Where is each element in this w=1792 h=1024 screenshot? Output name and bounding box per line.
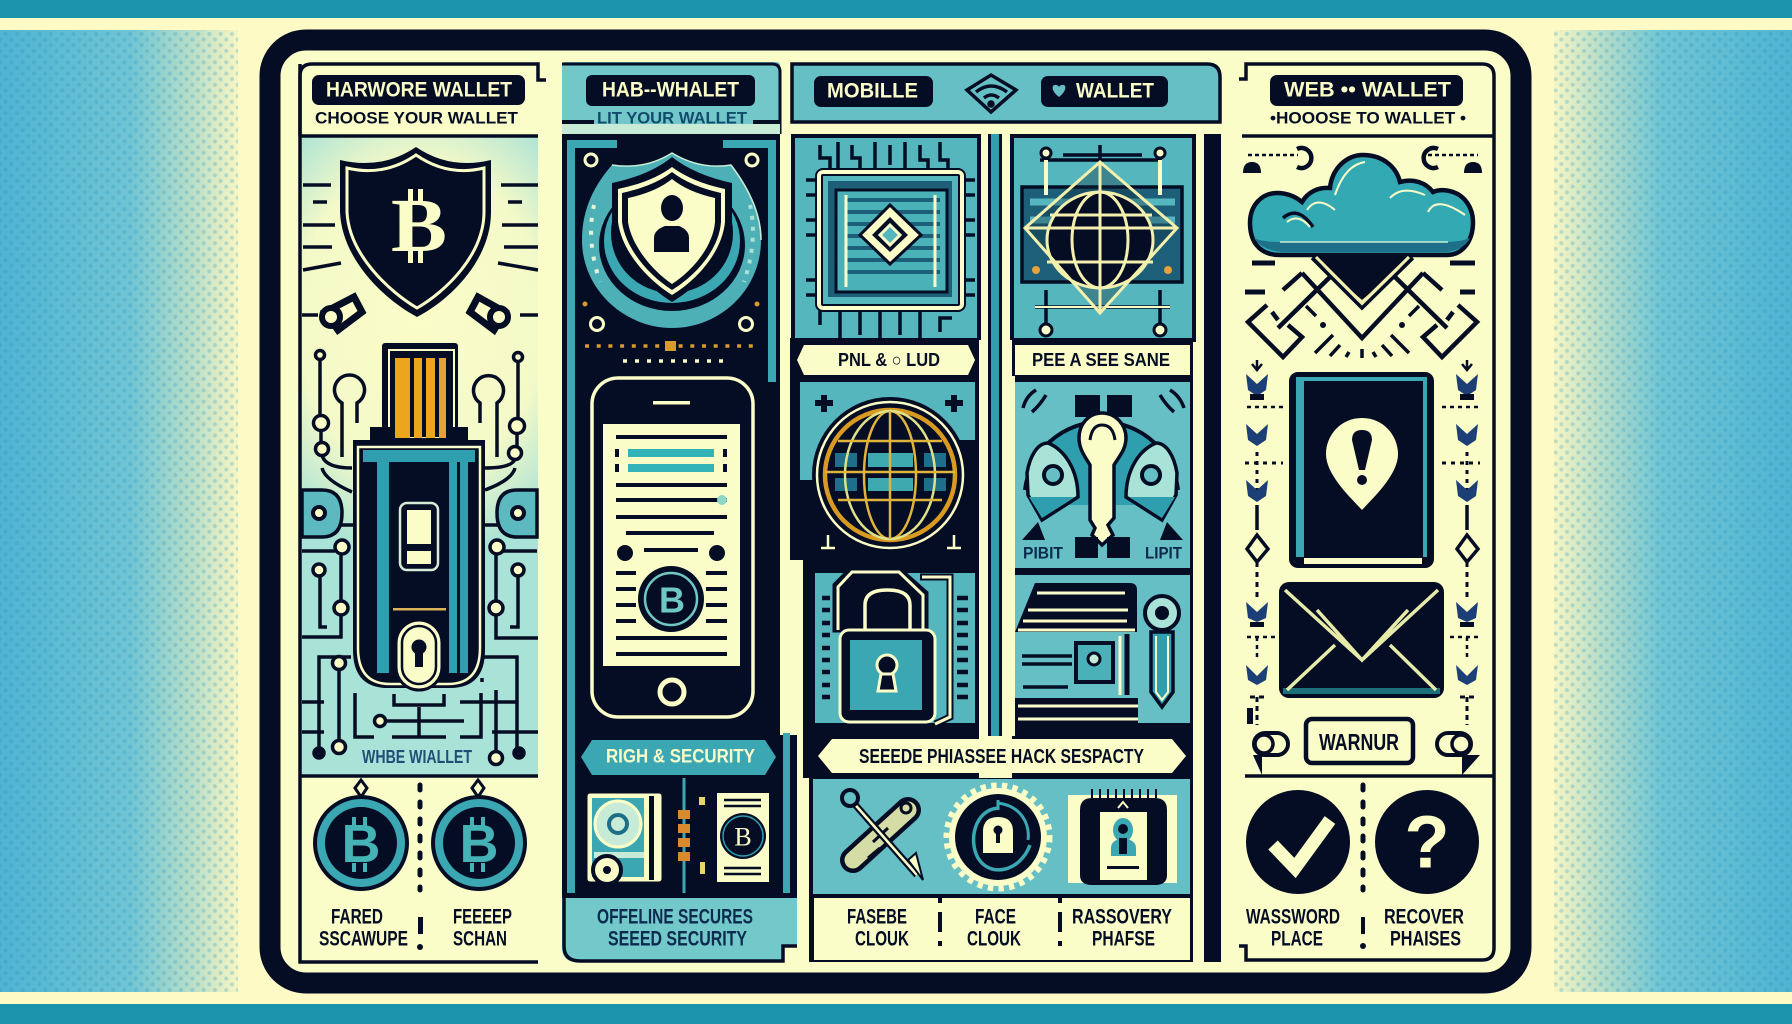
banner: right and security	[581, 740, 776, 775]
key captions: PIBIT	[1023, 544, 1064, 562]
icon: right tag	[470, 297, 508, 330]
icon: left tag	[322, 297, 362, 330]
background halftone right	[1554, 30, 1792, 992]
web captions	[1246, 906, 1464, 950]
hardware title: HARWORE WALLET	[326, 78, 512, 102]
icon: bitcoin coin left	[315, 780, 407, 889]
offline seed caption: SEEED SECURITY	[608, 928, 747, 950]
icon: identity card	[1068, 789, 1177, 885]
toggle icons	[1253, 733, 1480, 775]
web captions: PHAISES	[1390, 928, 1461, 950]
small rivets and dots	[582, 154, 760, 361]
icon: bitcoin coin right: B	[460, 814, 498, 874]
icon: crossed tools	[842, 790, 923, 880]
coin captions: SSCAWUPE	[319, 928, 408, 950]
warning label: WARNUR	[1319, 729, 1399, 755]
side ornaments left	[1245, 360, 1283, 725]
dotted divider	[1360, 785, 1366, 890]
second column header	[562, 62, 780, 124]
label: seed phrase: PEE A SEE SANE	[1032, 350, 1170, 370]
warning label	[1306, 719, 1413, 763]
panel: document stack and pin	[1015, 575, 1190, 723]
label: web wallet: WHBE WIALLET	[362, 747, 472, 767]
hardware illustration background	[300, 136, 538, 776]
icon: cloud	[1250, 155, 1473, 255]
circuit traces	[302, 350, 538, 764]
icon: person shield with ring	[582, 153, 761, 328]
second column subtitle: LIT YOUR WALLET	[597, 108, 748, 128]
panel: captions: FASEBE	[847, 906, 907, 928]
panel: captions: FACE	[975, 906, 1016, 928]
banner: seed phrase backup: SEEEDE PHIASSEE HACK SESPACTY	[859, 746, 1145, 768]
icon: smartphone with seed list: B	[659, 580, 685, 620]
icon: bitcoin coin left: B	[342, 814, 380, 874]
coin captions	[319, 906, 512, 950]
mobile header bar	[792, 64, 1220, 122]
bottom band	[0, 1004, 1792, 1024]
offline seed caption: OFFELINE SECURES	[597, 906, 753, 928]
divider strip	[988, 134, 1002, 736]
coin captions: SCHAN	[453, 928, 507, 950]
panel: security icons	[813, 779, 1190, 894]
panel: captions	[814, 898, 1190, 960]
web title pill: WEB •• WALLET	[1284, 78, 1451, 102]
web captions: PLACE	[1271, 928, 1323, 950]
top band	[0, 0, 1792, 18]
label: pin and cloud	[797, 345, 975, 375]
banner: right and security: RIGH & SECURITY	[606, 746, 755, 768]
panel: globe diamond	[1012, 136, 1194, 340]
panel: hardware wallet column	[300, 64, 546, 962]
wallet title pill: WALLET	[1076, 80, 1154, 102]
panel: chip	[793, 136, 979, 340]
dark column base	[790, 134, 1221, 962]
web subtitle: •HOOOSE TO WALLET •	[1270, 108, 1466, 128]
icon: envelope	[1279, 582, 1444, 698]
panel: padlock	[815, 570, 975, 724]
mobile title pill: MOBILLE	[827, 80, 918, 102]
icon: bitcoin shield	[340, 147, 491, 317]
icon: question circle: ?	[1404, 800, 1450, 884]
icon: top connectors	[1243, 148, 1482, 173]
panel: second wallet column	[562, 62, 797, 962]
icon: right bitcoin card: B	[734, 822, 752, 852]
panel: captions: RASSOVERY	[1072, 906, 1172, 928]
panel: globe	[800, 382, 975, 553]
web header outline	[1239, 64, 1494, 960]
icon: bitcoin coin right	[433, 780, 525, 889]
panel: captions: PHAFSE	[1092, 928, 1155, 950]
mobile title pill	[814, 76, 933, 107]
icon: right bitcoin card	[717, 793, 769, 882]
dotted divider	[418, 785, 422, 890]
icon: check circle	[1246, 790, 1350, 894]
wallet title pill	[1041, 76, 1168, 107]
icon: question circle	[1375, 790, 1479, 894]
background halftone left	[0, 30, 238, 992]
icon: left seed card	[587, 793, 662, 884]
web captions: WASSWORD	[1246, 906, 1340, 928]
second column title	[586, 75, 755, 106]
connector bits	[678, 778, 705, 893]
panel: web wallet column	[1239, 64, 1494, 960]
hardware subtitle: CHOOSE YOUR WALLET	[315, 108, 519, 128]
dark phone panel	[562, 134, 797, 898]
label: pin and cloud: PNL & ○ LUD	[838, 350, 940, 370]
second column title: HAB--WHALET	[602, 78, 739, 102]
icon: descending chevrons	[1245, 257, 1477, 358]
panel: captions: CLOUK	[967, 928, 1021, 950]
banner: seed phrase backup	[818, 739, 1186, 773]
label: seed phrase	[1015, 345, 1190, 375]
vertical rails	[979, 340, 1015, 736]
icon: wifi	[967, 75, 1016, 112]
panel: captions: CLOUK	[855, 928, 909, 950]
icon: lock badge	[947, 786, 1049, 888]
icon: warning book	[1289, 372, 1434, 568]
side ornaments right	[1442, 360, 1480, 725]
icon: bitcoin shield: B	[391, 184, 447, 268]
panel: key: LIPIT	[1145, 544, 1183, 562]
panel: key	[1015, 382, 1190, 568]
offline seed caption	[562, 898, 797, 962]
coin captions: FEEEEP	[453, 906, 512, 928]
web title pill	[1270, 75, 1463, 106]
web captions: RECOVER	[1384, 906, 1464, 928]
icon: smartphone with seed list	[592, 378, 753, 717]
side rays	[302, 185, 538, 315]
icon: teal connectors	[302, 490, 537, 537]
hardware header outline	[300, 64, 546, 136]
panel: mobile wallet column	[790, 64, 1221, 962]
icon: USB hardware wallet	[353, 343, 485, 690]
coin captions: FARED	[331, 906, 383, 928]
main frame	[270, 40, 1521, 983]
